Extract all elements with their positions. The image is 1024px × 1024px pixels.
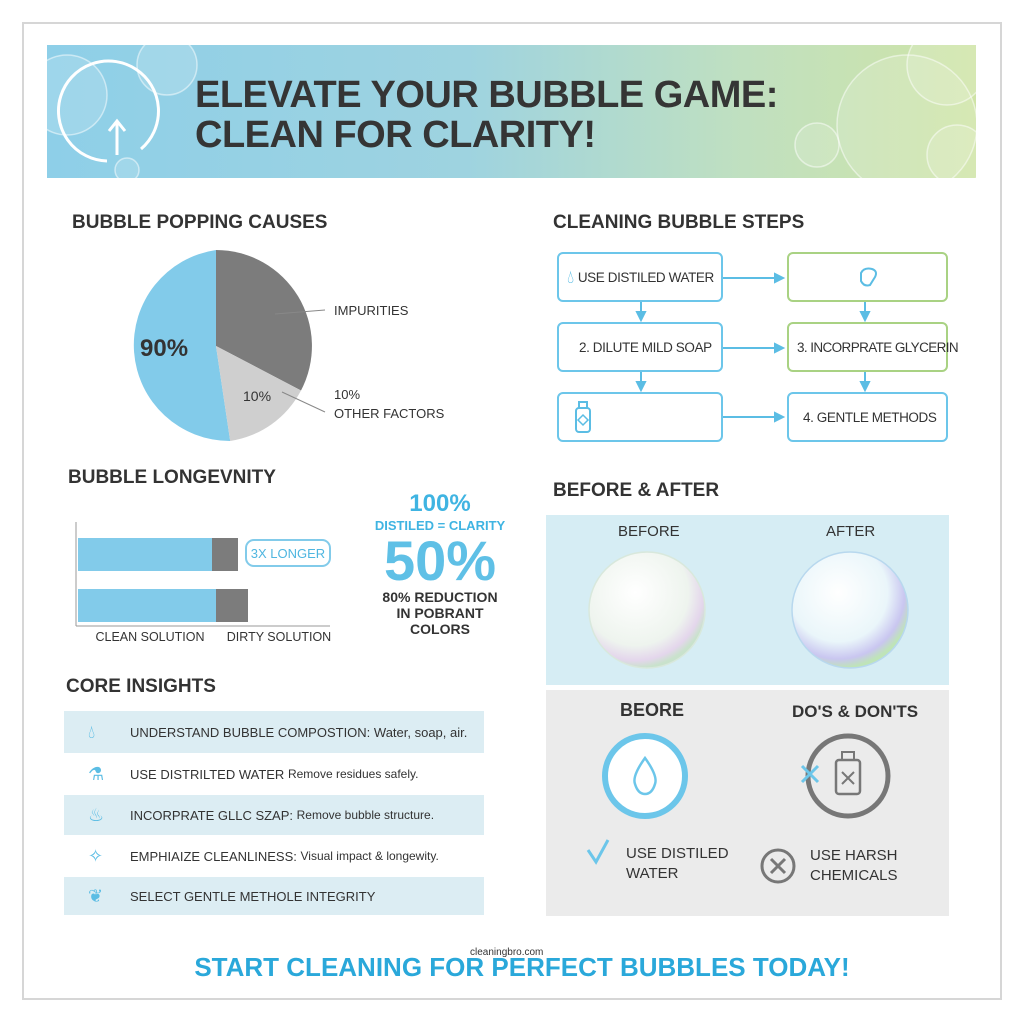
icon: bubble with arrow (58, 61, 158, 161)
pie chart: 90% (140, 335, 188, 362)
step 4: 4. GENTLE METHODS (803, 410, 936, 424)
step: use distilled water (557, 252, 723, 302)
insight 3: INCORPRATE GLLC SZAP: (130, 808, 293, 822)
bar chart: DIRTY SOLUTION (227, 630, 331, 644)
heading: before & after: BEFORE & AFTER (553, 480, 719, 501)
icon: no chemicals (802, 736, 888, 816)
pie chart (134, 250, 445, 441)
arrows (636, 272, 870, 423)
insight 3: ♨︎ (88, 804, 104, 824)
stats block: 100% (409, 490, 471, 517)
bar chart (76, 522, 331, 644)
insights list (64, 711, 484, 915)
insight 3: Remove bubble structure. (297, 808, 434, 822)
step: soap icon (787, 252, 948, 302)
step: use distilled water: 💧︎ (567, 266, 574, 286)
insight 5: ❦ (88, 886, 103, 906)
insight 5 (64, 877, 484, 915)
step 3: 3. INCORPRATE GLYCERIN (797, 340, 958, 354)
step 2 (557, 322, 723, 372)
icon: check drop (588, 840, 608, 862)
insight 2: USE DISTRILTED WATER (130, 766, 284, 782)
insight 5: SELECT GENTLE METHOLE INTEGRITY (130, 888, 375, 904)
stats block: DISTILED = CLARITY (375, 518, 505, 533)
insight 4: Visual impact & longewity. (300, 849, 439, 863)
panel: do's & don'ts: WATER (626, 865, 678, 882)
bubble after (792, 552, 908, 668)
bubble before (589, 552, 705, 668)
title (195, 74, 778, 156)
step 2: 2. DILUTE MILD SOAP (579, 340, 712, 354)
panel: before & after bubbles (546, 515, 949, 685)
flow chart: steps (557, 252, 958, 442)
bar chart: CLEAN SOLUTION (95, 630, 205, 644)
pie chart: IMPURITIES (334, 303, 409, 318)
panel: do's & don'ts: USE DISTILED (626, 845, 729, 862)
stats block: 50% (384, 529, 496, 592)
title: CLEAN FOR CLARITY! (195, 114, 596, 156)
insight 1: UNDERSTAND BUBBLE COMPOSTION: Water, soap, air. (130, 724, 467, 740)
icon: x circle (762, 850, 794, 882)
insight 2: ⚗︎ (88, 764, 104, 784)
heading: core insights: CORE INSIGHTS (66, 676, 216, 697)
stats block: 80% REDUCTION (382, 589, 498, 605)
step 3 (787, 322, 948, 372)
insight 1 (64, 711, 484, 753)
stats block (375, 490, 505, 637)
insight 2 (88, 764, 418, 784)
panel: do's & don'ts: BEORE (620, 700, 684, 720)
insight 1: 💧︎ (88, 722, 95, 742)
panel: before & after bubbles: AFTER (826, 523, 875, 540)
pie chart: OTHER FACTORS (334, 406, 445, 421)
panel: do's & don'ts: USE HARSH (810, 847, 898, 864)
heading: bubble longevity: BUBBLE LONGEVNITY (68, 467, 276, 488)
step 4 (787, 392, 948, 442)
insight 4: ✧ (88, 846, 103, 866)
insight 2: Remove residues safely. (288, 767, 418, 781)
header banner (47, 45, 976, 178)
stats block: COLORS (410, 621, 470, 637)
panel: before & after bubbles: BEFORE (618, 523, 680, 540)
pie chart: 10% (243, 388, 271, 404)
panel: do's & don'ts (546, 690, 949, 916)
pie chart: 10% (334, 387, 360, 402)
panel: do's & don'ts: DO'S & DON'TS (792, 702, 918, 721)
footer call to action: START CLEANING FOR PERFECT BUBBLES TODAY! (194, 952, 850, 982)
watermark: cleaningbro.com (470, 947, 543, 958)
title: ELEVATE YOUR BUBBLE GAME: (195, 74, 778, 116)
panel: do's & don'ts: CHEMICALS (810, 867, 898, 884)
icon: water drop circle (605, 736, 685, 816)
heading: cleaning bubble steps: CLEANING BUBBLE STEPS (553, 212, 804, 233)
step: bottle icon (557, 392, 723, 442)
insight 4: EMPHIAIZE CLEANLINESS: (130, 848, 297, 864)
stats block: IN POBRANT (396, 605, 484, 621)
insight 3 (64, 795, 484, 835)
insight 4 (88, 846, 439, 866)
bar chart: 3X LONGER (251, 546, 325, 561)
heading: bubble popping causes: BUBBLE POPPING CAUSES (72, 212, 327, 233)
step: use distilled water: USE DISTILED WATER (578, 270, 714, 284)
